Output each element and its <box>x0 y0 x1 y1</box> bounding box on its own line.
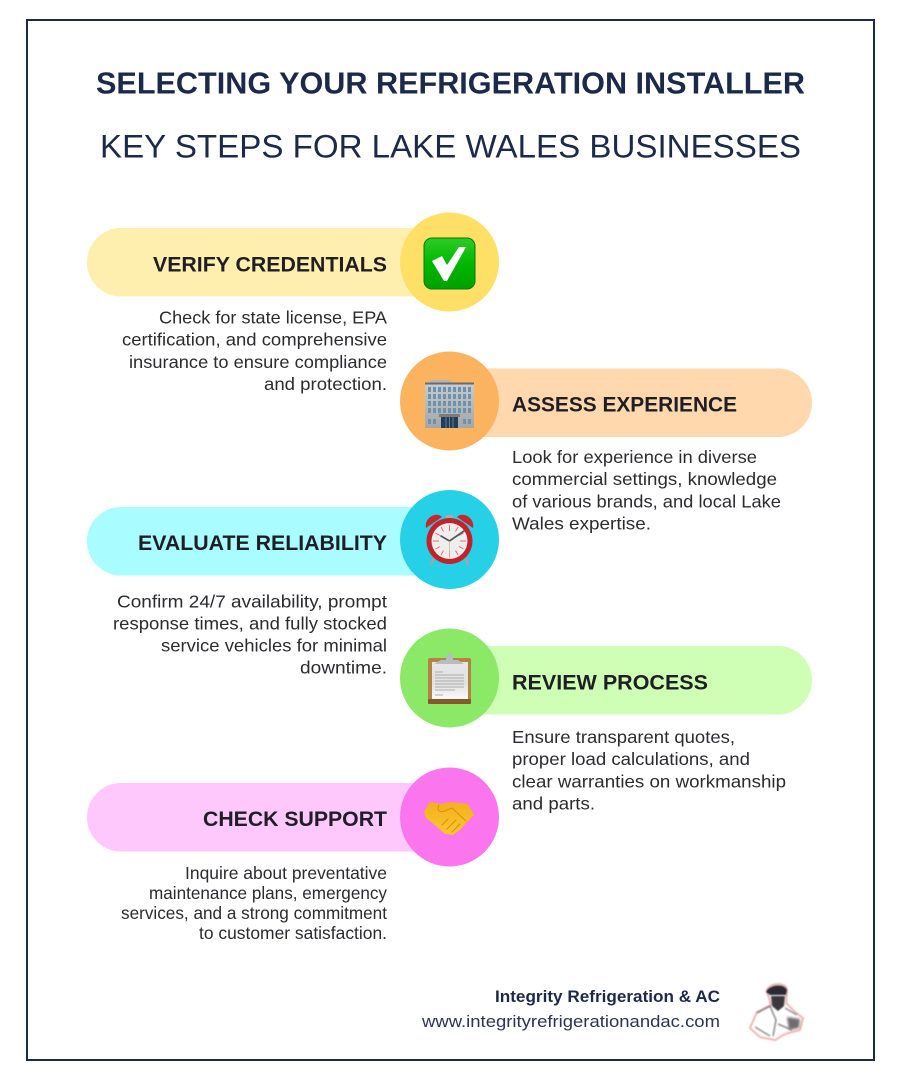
text: check support <box>121 863 387 943</box>
icon: alarm clock <box>426 515 473 564</box>
circle: verify credentials <box>400 212 499 312</box>
step 1: verify credentials <box>87 212 499 394</box>
text: check support: Inquire about preventative <box>185 863 387 883</box>
heading: evaluate reliability: EVALUATE RELIABILITY <box>138 532 387 555</box>
text: evaluate reliability: response times, and fully stocked <box>113 614 387 634</box>
text: verify credentials: insurance to ensure compliance <box>129 352 387 372</box>
heading: check support: CHECK SUPPORT <box>203 808 387 831</box>
circle: review process <box>400 628 499 728</box>
text: check support: maintenance plans, emergency <box>149 883 387 903</box>
text: assess experience: commercial settings, knowledge <box>512 469 777 489</box>
logo: technician illustration <box>750 984 803 1040</box>
heading: assess experience: ASSESS EXPERIENCE <box>512 394 737 416</box>
text: verify credentials: Check for state license, EPA <box>159 308 387 328</box>
text: review process: and parts. <box>512 794 595 814</box>
pill: evaluate reliability <box>87 507 457 576</box>
step 3: evaluate reliability <box>87 490 499 678</box>
title: SELECTING YOUR REFRIGERATION INSTALLER <box>96 66 805 100</box>
footer: company name: Integrity Refrigeration & AC <box>495 988 720 1006</box>
circle: check support <box>400 768 499 866</box>
text: review process: Ensure transparent quotes, <box>512 727 735 747</box>
icon: handshake <box>424 802 474 835</box>
text: review process <box>512 727 786 814</box>
pill: review process <box>445 646 812 714</box>
pill: check support <box>87 783 457 852</box>
text: check support: services, and a strong commitment <box>121 903 387 923</box>
text: assess experience: of various brands, and local Lake <box>512 492 781 512</box>
heading: review process: REVIEW PROCESS <box>512 672 708 694</box>
text: review process: clear warranties on workmanship <box>512 772 786 792</box>
step 5: check support <box>87 768 499 943</box>
step 2: assess experience <box>400 352 812 534</box>
circle: evaluate reliability <box>400 490 499 589</box>
footer: website: www.integrityrefrigerationandac.com <box>421 1012 720 1031</box>
text: verify credentials <box>122 308 387 394</box>
icon: office building <box>425 380 474 428</box>
step 4: review process <box>400 628 812 814</box>
pill: assess experience <box>445 368 812 437</box>
text: evaluate reliability: downtime. <box>300 658 387 678</box>
text: assess experience: Look for experience in diverse <box>512 447 757 467</box>
text: verify credentials: and protection. <box>264 374 387 394</box>
text: assess experience: Wales expertise. <box>512 514 651 534</box>
text: verify credentials: certification, and comprehensive <box>122 330 387 350</box>
circle: assess experience <box>400 352 499 450</box>
text: evaluate reliability: service vehicles for minimal <box>161 636 387 656</box>
text: evaluate reliability <box>113 592 387 678</box>
icon: clipboard <box>428 653 471 704</box>
heading: verify credentials: VERIFY CREDENTIALS <box>153 254 387 276</box>
text: evaluate reliability: Confirm 24/7 availability, prompt <box>117 592 387 612</box>
text: review process: proper load calculations, and <box>512 749 750 769</box>
text: assess experience <box>512 447 781 534</box>
pill: verify credentials <box>87 228 457 296</box>
icon: green check mark <box>424 238 475 289</box>
subtitle: KEY STEPS FOR LAKE WALES BUSINESSES <box>100 128 801 164</box>
text: check support: to customer satisfaction. <box>199 923 387 943</box>
